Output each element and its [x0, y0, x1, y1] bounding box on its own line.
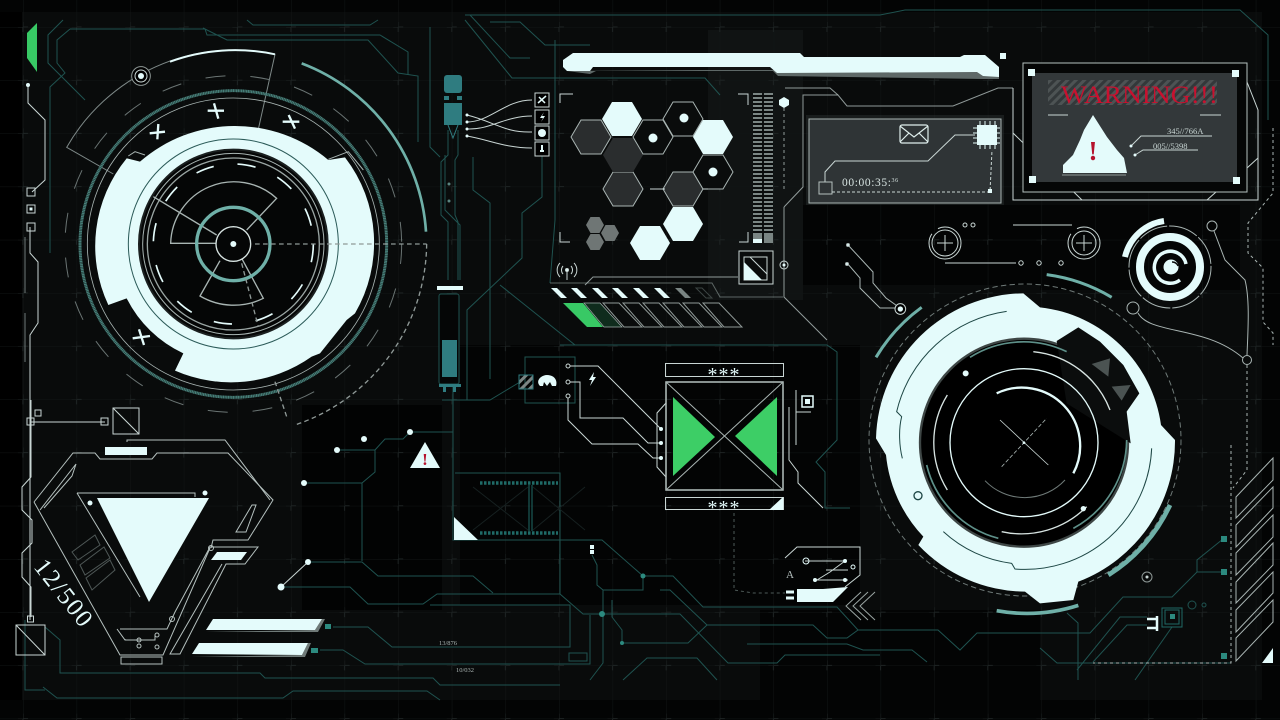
bottom label: [666, 497, 784, 519]
small target and teal chips bottom right: [1142, 536, 1227, 659]
hourglass box: [666, 364, 784, 519]
connector wires right: [846, 128, 1273, 663]
icon: plug: [1147, 608, 1182, 631]
small gray hexagons: [586, 217, 619, 250]
small teal nodes: [590, 545, 646, 645]
radar gauge left: [65, 50, 427, 425]
timer text: 36: [892, 178, 899, 184]
icon: diagonal box lower: [16, 625, 45, 655]
white corner triangle center: [454, 517, 478, 540]
outer wedge arc: [67, 50, 275, 227]
node circle: [895, 304, 906, 314]
gauge right: [869, 275, 1181, 613]
warning highlight: [1048, 80, 1217, 105]
warning triangle: [1062, 115, 1127, 175]
frame: [666, 382, 783, 490]
ladder bars: [753, 93, 773, 243]
radar sectors: [153, 182, 277, 305]
dashed ring: [869, 284, 1181, 596]
small readouts: 10/032: [456, 667, 474, 674]
cross markers: [133, 103, 299, 345]
circuit traces: teal bottom network: [25, 340, 1231, 700]
readout: 12/500: [28, 554, 98, 632]
bottom label: ***: [708, 497, 740, 519]
crosshair: [1000, 418, 1048, 467]
small warning icon: [410, 442, 440, 469]
timer text: 00:00:35:: [842, 177, 892, 189]
top white bar: [563, 53, 1006, 79]
circuit traces: teal top network: [48, 10, 1268, 508]
label tab: [105, 447, 147, 455]
small readouts: 13/876: [439, 640, 458, 647]
white data bars: [192, 619, 331, 657]
teal film strip: [473, 483, 585, 533]
dashed outer ring: [65, 76, 402, 412]
timer panel: [806, 115, 1004, 205]
panel frame around hexagon section: [550, 88, 1013, 340]
ring inset lines: [897, 311, 1152, 569]
small white tab: [211, 552, 247, 560]
white triangle: [97, 498, 209, 602]
warning data: 345//766A: [1167, 126, 1204, 136]
green triangles: [673, 397, 715, 476]
warning data: [1130, 126, 1212, 156]
icon: diagonal corner box: [739, 251, 773, 284]
gray triangles: [1092, 358, 1131, 401]
teal accents: [876, 275, 1170, 613]
thin ring: [87, 98, 379, 390]
frame dots: [88, 490, 208, 506]
small cloud node box: [519, 357, 596, 403]
outer teal arc: [302, 63, 426, 232]
black hole: [920, 327, 1139, 547]
icon: chip: [973, 121, 1000, 149]
corner squares: [1028, 69, 1240, 184]
icon: diagonal box upper: [113, 408, 139, 434]
small warning icon: !: [422, 450, 428, 469]
dark hexagons: [571, 120, 703, 206]
ring detail: [128, 139, 363, 349]
warning triangle: !: [1088, 136, 1098, 166]
dotted link to chip: [734, 513, 785, 593]
small plus dials: [929, 223, 1100, 265]
parallelogram stack right: [1236, 458, 1273, 661]
side marks of hourglass box: [789, 390, 823, 508]
wires to icon column: [466, 100, 532, 148]
corner triangle right: [1262, 648, 1273, 663]
chevrons: [846, 592, 875, 620]
top label: [666, 364, 784, 386]
left side wires and squares: [22, 83, 108, 622]
dashed lines: [242, 244, 427, 425]
warning panel: [1013, 63, 1258, 200]
circuit chip module: [785, 547, 860, 602]
cable tube: [437, 75, 463, 392]
node dots and white link: [278, 429, 413, 590]
inner dots: [963, 370, 1086, 511]
top label: ***: [708, 364, 740, 386]
warning data: 005//5398: [1153, 141, 1187, 151]
icon: green shard: [27, 23, 37, 72]
warning text: WARNING!!!: [1061, 82, 1218, 109]
spiral target: [1125, 221, 1211, 308]
outer frame: [34, 440, 273, 664]
inner arcs: [927, 342, 1127, 538]
triangle panel: [28, 440, 273, 664]
white ring: [876, 293, 1175, 603]
node ring: [132, 67, 150, 85]
outline hexagons: [633, 102, 733, 189]
icon: antenna: [557, 263, 577, 280]
small readouts: [439, 640, 587, 674]
hexagon panel: [560, 94, 748, 260]
nodes on hex panel: [779, 97, 789, 269]
white hexagons: [602, 102, 733, 260]
circuit chip module: A: [786, 569, 794, 581]
progress stripes: [551, 288, 742, 327]
radar core: [197, 207, 270, 281]
corner brackets: [560, 94, 748, 242]
icon: envelope: [900, 125, 928, 143]
teal ring: [80, 91, 387, 397]
icon column: [535, 93, 549, 156]
wires to hourglass box: [568, 366, 666, 477]
white ring: [95, 126, 374, 382]
